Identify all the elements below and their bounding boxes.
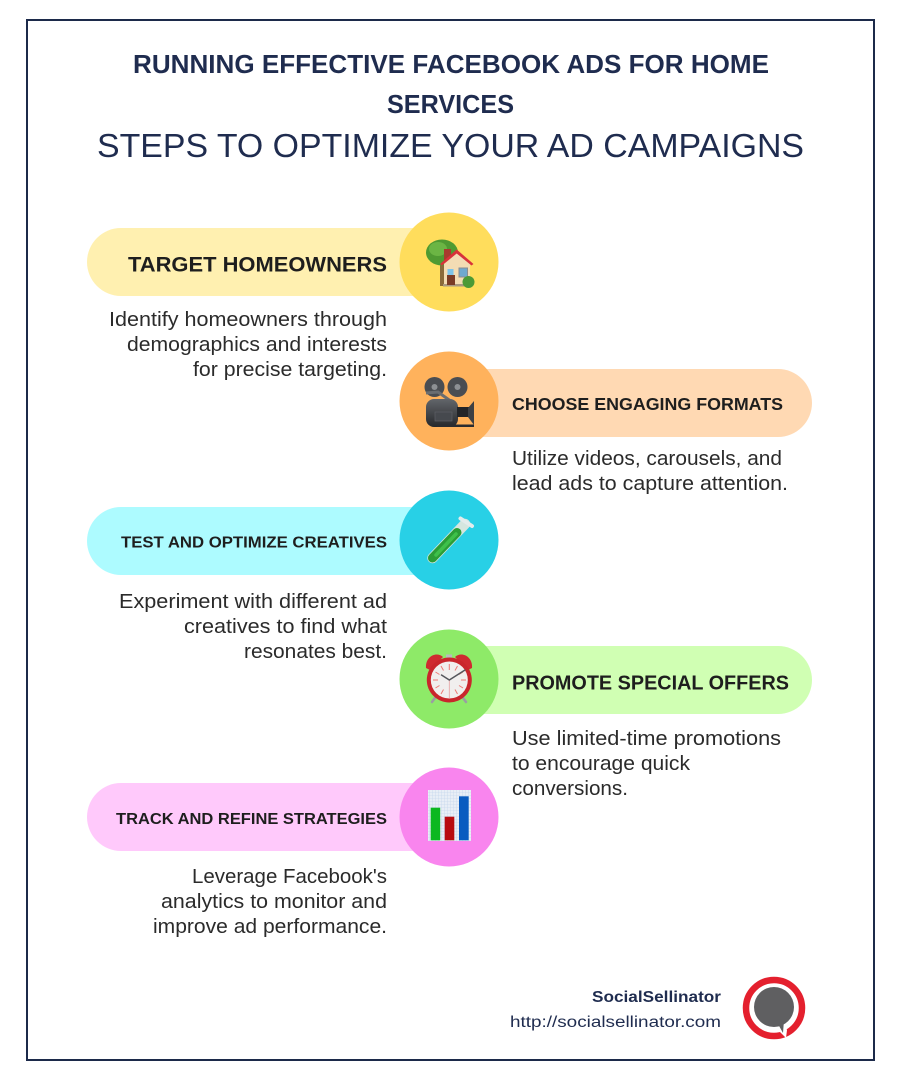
- icon badge: pink circle: [400, 768, 498, 866]
- subtitle: STEPS TO OPTIMIZE YOUR AD CAMPAIGNS: [97, 127, 804, 164]
- icon: alarm clock: [426, 654, 472, 702]
- icon badge: yellow circle: [400, 212, 498, 312]
- text: promote special offers body: Use limited-time promotions: [512, 728, 781, 750]
- panel: test and optimize creatives: [87, 490, 498, 590]
- icon: bar chart: [428, 790, 471, 841]
- text: target homeowners heading: TARGET HOMEOWNERS: [128, 252, 387, 276]
- title: SERVICES: [387, 89, 514, 119]
- text: test and optimize creatives body: [119, 591, 387, 663]
- text: promote special offers heading: PROMOTE SPECIAL OFFERS: [512, 672, 789, 694]
- pill: track and refine strategies: [87, 783, 447, 851]
- icon badge: cyan circle: [400, 490, 498, 590]
- icon: test tube: [432, 518, 472, 558]
- text: test and optimize creatives heading: TEST AND OPTIMIZE CREATIVES: [121, 534, 387, 552]
- title: RUNNING EFFECTIVE FACEBOOK ADS FOR HOME: [133, 49, 769, 79]
- panel: track and refine strategies: [87, 768, 498, 866]
- text: target homeowners body: for precise targeting.: [193, 359, 387, 381]
- panel: promote special offers: [400, 630, 812, 728]
- pill: choose engaging formats: [452, 369, 812, 437]
- text: target homeowners body: Identify homeowners through: [109, 309, 387, 331]
- pill: test and optimize creatives: [87, 507, 447, 575]
- text: choose engaging formats body: Utilize videos, carousels, and: [512, 448, 782, 470]
- icon badge: orange circle: [400, 352, 498, 450]
- title: [133, 49, 769, 119]
- text: test and optimize creatives body: resonates best.: [244, 641, 387, 663]
- text: track and refine strategies heading: TRACK AND REFINE STRATEGIES: [116, 811, 387, 828]
- text: website url: http://socialsellinator.com: [510, 1014, 721, 1031]
- panel: choose engaging formats: [400, 352, 812, 450]
- pill: target homeowners: [87, 228, 447, 296]
- text: track and refine strategies body: Leverage Facebook's: [192, 866, 387, 888]
- text: choose engaging formats body: [512, 448, 788, 495]
- text: promote special offers body: to encourage quick: [512, 753, 691, 775]
- text: track and refine strategies body: [153, 866, 387, 938]
- text: target homeowners body: demographics and interests: [127, 334, 387, 356]
- text: brand name: SocialSellinator: [592, 989, 721, 1006]
- text: test and optimize creatives body: Experiment with different ad: [119, 591, 387, 613]
- text: track and refine strategies body: analytics to monitor and: [161, 891, 387, 913]
- icon: house with tree: [426, 240, 474, 288]
- text: track and refine strategies body: improve ad performance.: [153, 916, 387, 938]
- text: test and optimize creatives body: creatives to find what: [184, 616, 387, 638]
- text: promote special offers body: conversions.: [512, 778, 628, 800]
- text: target homeowners body: [109, 309, 387, 381]
- icon badge: green circle: [400, 630, 498, 728]
- panel: target homeowners: [87, 212, 498, 312]
- text: choose engaging formats heading: CHOOSE ENGAGING FORMATS: [512, 394, 783, 414]
- text: choose engaging formats body: lead ads to capture attention.: [512, 473, 788, 495]
- pill: promote special offers: [452, 646, 812, 714]
- icon: SocialSellinator logo: [746, 980, 802, 1038]
- icon: movie camera: [424, 377, 474, 427]
- text: promote special offers body: [512, 728, 781, 800]
